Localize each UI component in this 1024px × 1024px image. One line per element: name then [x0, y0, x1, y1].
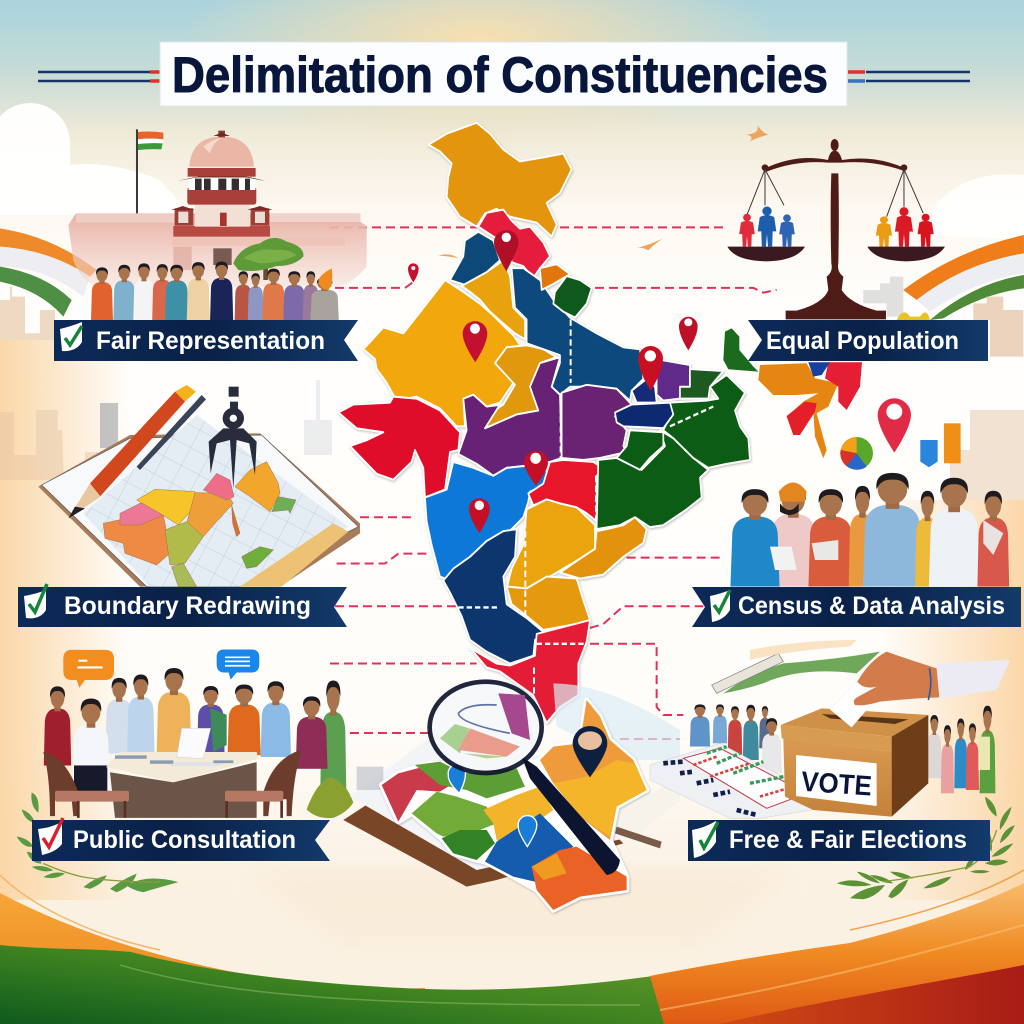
sticker map	[382, 700, 647, 910]
ballot box body	[781, 708, 928, 817]
pin 6	[469, 498, 490, 533]
region: small green	[553, 276, 592, 318]
magnifier map scene	[343, 682, 680, 910]
pin 4	[679, 317, 698, 350]
dashed internal borders	[458, 320, 713, 695]
ribbon: Equal Population: Equal Population	[766, 327, 959, 355]
paper	[42, 435, 358, 587]
region: north bengal blue	[632, 379, 657, 403]
hand with ballot	[830, 652, 1010, 727]
region: himachal red	[478, 210, 550, 278]
ribbon: Free and Fair Elections	[688, 820, 990, 861]
book board	[343, 740, 680, 887]
consultation: chairs	[43, 750, 302, 818]
region: telangana orange	[507, 499, 595, 588]
region: north orange	[428, 123, 572, 237]
pin 7	[408, 263, 419, 282]
ribbon: Equal Population	[748, 320, 988, 361]
region: punjab blue	[450, 232, 500, 286]
scene: supreme court and crowd	[0, 129, 367, 340]
tree	[233, 238, 303, 280]
region: odisha green	[597, 430, 708, 529]
voters right	[927, 706, 995, 793]
flag swoosh left	[0, 228, 97, 317]
flag	[136, 129, 163, 213]
title banner: Delimitation of Constituencies	[172, 47, 828, 103]
faint sky panel	[553, 683, 680, 760]
pin 2	[463, 321, 487, 362]
region: rajasthan	[363, 280, 522, 426]
sticker outline	[382, 700, 647, 910]
ribbon: Free and Fair Elections: Free & Fair Elections	[729, 826, 967, 854]
region: green east	[680, 369, 723, 399]
bottom tricolour sweep	[0, 870, 1024, 1024]
birds	[438, 125, 769, 258]
pin 3	[638, 346, 663, 391]
voters left	[690, 704, 782, 773]
region: maharashtra	[425, 462, 557, 581]
map pins	[408, 125, 769, 533]
scene: ballot box	[650, 640, 1015, 899]
region: uttarakhand	[540, 264, 570, 290]
east map fragment	[723, 328, 862, 458]
ballot box body: VOTE	[800, 766, 873, 802]
connector dashed lines	[330, 227, 777, 739]
pencil	[68, 385, 196, 518]
bar icons	[920, 423, 961, 467]
compass	[209, 387, 257, 488]
flag swoosh right	[903, 235, 1024, 320]
large pin	[878, 398, 911, 453]
EVM ballot stack	[650, 743, 823, 818]
scene: public consultation	[17, 650, 353, 892]
region: madhya pradesh	[458, 357, 562, 476]
pin 5	[524, 451, 548, 486]
court building	[68, 131, 367, 287]
map grid	[83, 415, 348, 587]
pin 1	[494, 230, 519, 271]
ribbon: Boundary Redrawing: Boundary Redrawing	[64, 592, 311, 620]
pen	[137, 395, 206, 470]
drawn map patches	[103, 462, 296, 587]
region: gujarat	[338, 397, 460, 497]
dark pin	[573, 726, 607, 777]
board	[38, 433, 360, 587]
consultation: table	[106, 728, 258, 818]
census citizens	[730, 473, 1009, 587]
ribbon: Public Consultation	[32, 818, 330, 861]
scene: scales of justice	[723, 139, 1024, 587]
title banner	[38, 42, 970, 106]
faded city right	[863, 277, 903, 317]
ribbon: Census and Data Analysis	[692, 587, 1021, 627]
region: bihar purple	[562, 385, 632, 460]
crowd	[91, 261, 339, 320]
speech bubble blue	[217, 650, 259, 680]
region: bengal blue	[615, 403, 673, 428]
region: lower orange	[507, 577, 590, 630]
region: purple east	[657, 359, 690, 401]
region: north east green	[663, 375, 750, 468]
region: coastal orange	[560, 517, 647, 579]
right pan	[867, 169, 945, 261]
ribbon: Fair Representation: Fair Representation	[96, 327, 325, 355]
pie chart	[840, 437, 873, 470]
magnifying glass	[430, 682, 620, 875]
ribbon: Public Consultation: Public Consultation	[73, 826, 296, 854]
region: jharkhand green	[617, 430, 663, 470]
ribbon: Boundary Redrawing	[18, 584, 347, 627]
map of India	[338, 123, 750, 723]
left pan	[727, 169, 805, 261]
region: chhattisgarh red	[528, 460, 605, 521]
faded city left	[0, 287, 55, 340]
consultation: people	[44, 668, 346, 792]
ribbon: Fair Representation	[54, 320, 358, 361]
scene: map drawing table	[38, 385, 360, 587]
laurel left	[17, 792, 178, 892]
laurel right	[837, 797, 1015, 899]
flag swoosh	[712, 640, 880, 693]
ruler	[240, 523, 348, 587]
region: uttar pradesh	[512, 268, 643, 401]
speech bubble orange	[63, 650, 114, 688]
ribbon: Census and Data Analysis: Census & Data Analysis	[738, 592, 1005, 620]
scale stand	[762, 139, 907, 319]
region: karnataka	[443, 529, 543, 664]
faded city skylines	[0, 380, 1024, 500]
region: chambal orange	[487, 345, 557, 428]
plant	[307, 777, 353, 818]
region: southern red	[470, 620, 590, 723]
region: haryana orange	[462, 260, 525, 339]
blue map pins	[448, 765, 537, 847]
